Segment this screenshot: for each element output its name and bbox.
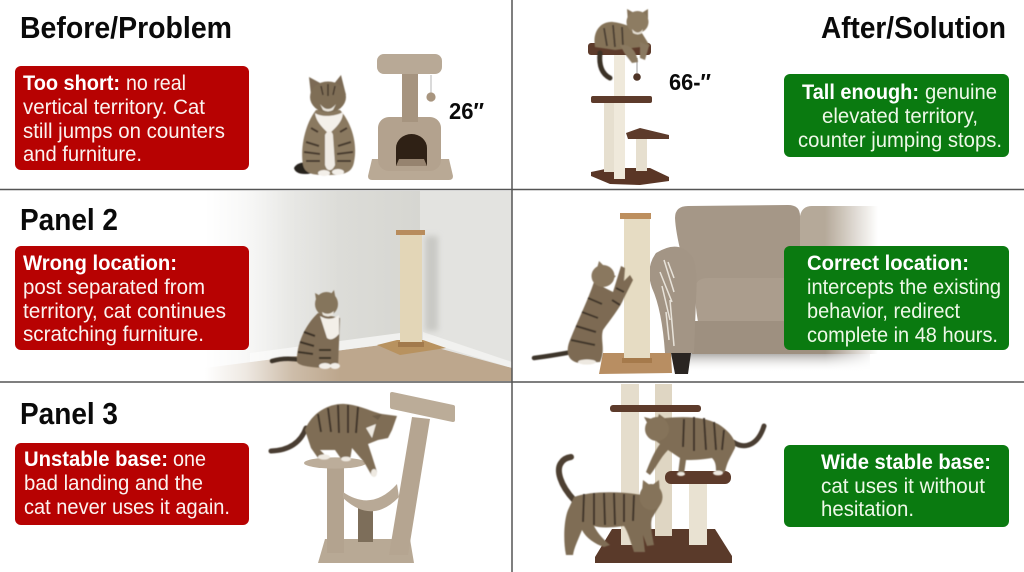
- illustration: floor scratching post in corner: [377, 230, 446, 355]
- panel: before, height problem: [15, 10, 484, 180]
- heading: before/problem: Before/Problem: [20, 10, 232, 45]
- heading: after/solution: After/Solution: [821, 10, 1006, 45]
- panel 3 solution: wide stable base: [559, 384, 1009, 563]
- illustration: tall cat tree: [588, 43, 669, 185]
- callout: correct location: intercepts the existing: [807, 276, 1001, 299]
- height label: 26 inches: 26″: [449, 98, 484, 124]
- illustration: empty room corner with wall and floor: [205, 191, 512, 381]
- callout: too short: still jumps on counters: [23, 120, 225, 143]
- callout: unstable base: Unstable base:: [24, 448, 168, 471]
- callout: wide stable base: hesitation.: [821, 498, 914, 521]
- callout: too short: [15, 66, 249, 170]
- callout: too short: vertical territory. Cat: [23, 96, 205, 119]
- callout: wrong location: scratching furniture.: [23, 323, 204, 346]
- illustration: sitting cat looking up: [272, 290, 340, 369]
- callout: tall enough: elevated territory,: [822, 105, 978, 128]
- illustration: cat standing on the base: [559, 457, 662, 555]
- callout: correct location: Correct location:: [807, 252, 969, 275]
- illustration: tall post beside sofa: [599, 213, 672, 374]
- illustration: sitting tabby cat: [294, 75, 355, 176]
- illustration: wobbly carpeted tree: [304, 394, 453, 563]
- callout: too short: Too short:: [23, 72, 120, 95]
- callout: wrong location: post separated from: [23, 276, 205, 299]
- callout: correct location: behavior, redirect: [807, 300, 960, 323]
- callout: wrong location: [15, 246, 249, 350]
- callout: unstable base: cat never uses it again.: [24, 496, 230, 519]
- illustration: short carpeted cat tree: [368, 54, 453, 180]
- callout: wide stable base: cat uses it without: [821, 475, 985, 498]
- callout: tall enough: [784, 74, 1009, 157]
- callout: tall enough: Tall enough:: [802, 81, 919, 104]
- panel 2: wrong location: [15, 191, 512, 381]
- illustration: tree with wide stable base: [595, 384, 732, 563]
- illustration: cat on upper platform: [644, 414, 764, 476]
- callout: tall enough: counter jumping stops.: [798, 129, 1002, 152]
- callout: tall enough: genuine: [925, 81, 997, 104]
- illustration: cat scratching the post: [534, 261, 633, 365]
- callout: correct location: complete in 48 hours.: [807, 324, 998, 347]
- height label: 66 inches: 66-″: [669, 69, 711, 95]
- callout: too short: and furniture.: [23, 143, 142, 166]
- illustration: scratched sofa: [649, 198, 878, 378]
- panel 2 solution: correct location: [534, 198, 1009, 378]
- callout: correct location: [784, 246, 1009, 350]
- callout: wide stable base: Wide stable base:: [821, 451, 991, 474]
- heading: panel 3: Panel 3: [20, 396, 118, 431]
- illustration: cat lounging on top perch: [594, 9, 650, 78]
- heading: panel 2: Panel 2: [20, 202, 118, 237]
- callout: wrong location: territory, cat continues: [23, 300, 226, 323]
- callout: unstable base: bad landing and the: [24, 472, 203, 495]
- panel: after, height solution: [588, 9, 1009, 185]
- callout: wide stable base: [784, 445, 1009, 527]
- illustration: cat stepping on unstable perch: [271, 404, 397, 477]
- callout: unstable base: one: [173, 448, 206, 471]
- callout: too short: no real: [126, 72, 186, 95]
- callout: wrong location: Wrong location:: [23, 252, 177, 275]
- callout: unstable base: [15, 443, 249, 525]
- panel 3: unstable base: [15, 394, 453, 563]
